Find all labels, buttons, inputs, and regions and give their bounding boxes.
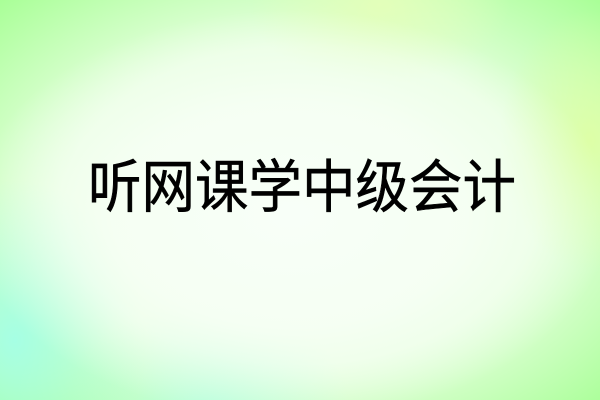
title text: 听网课学中级会计 — [88, 157, 516, 220]
